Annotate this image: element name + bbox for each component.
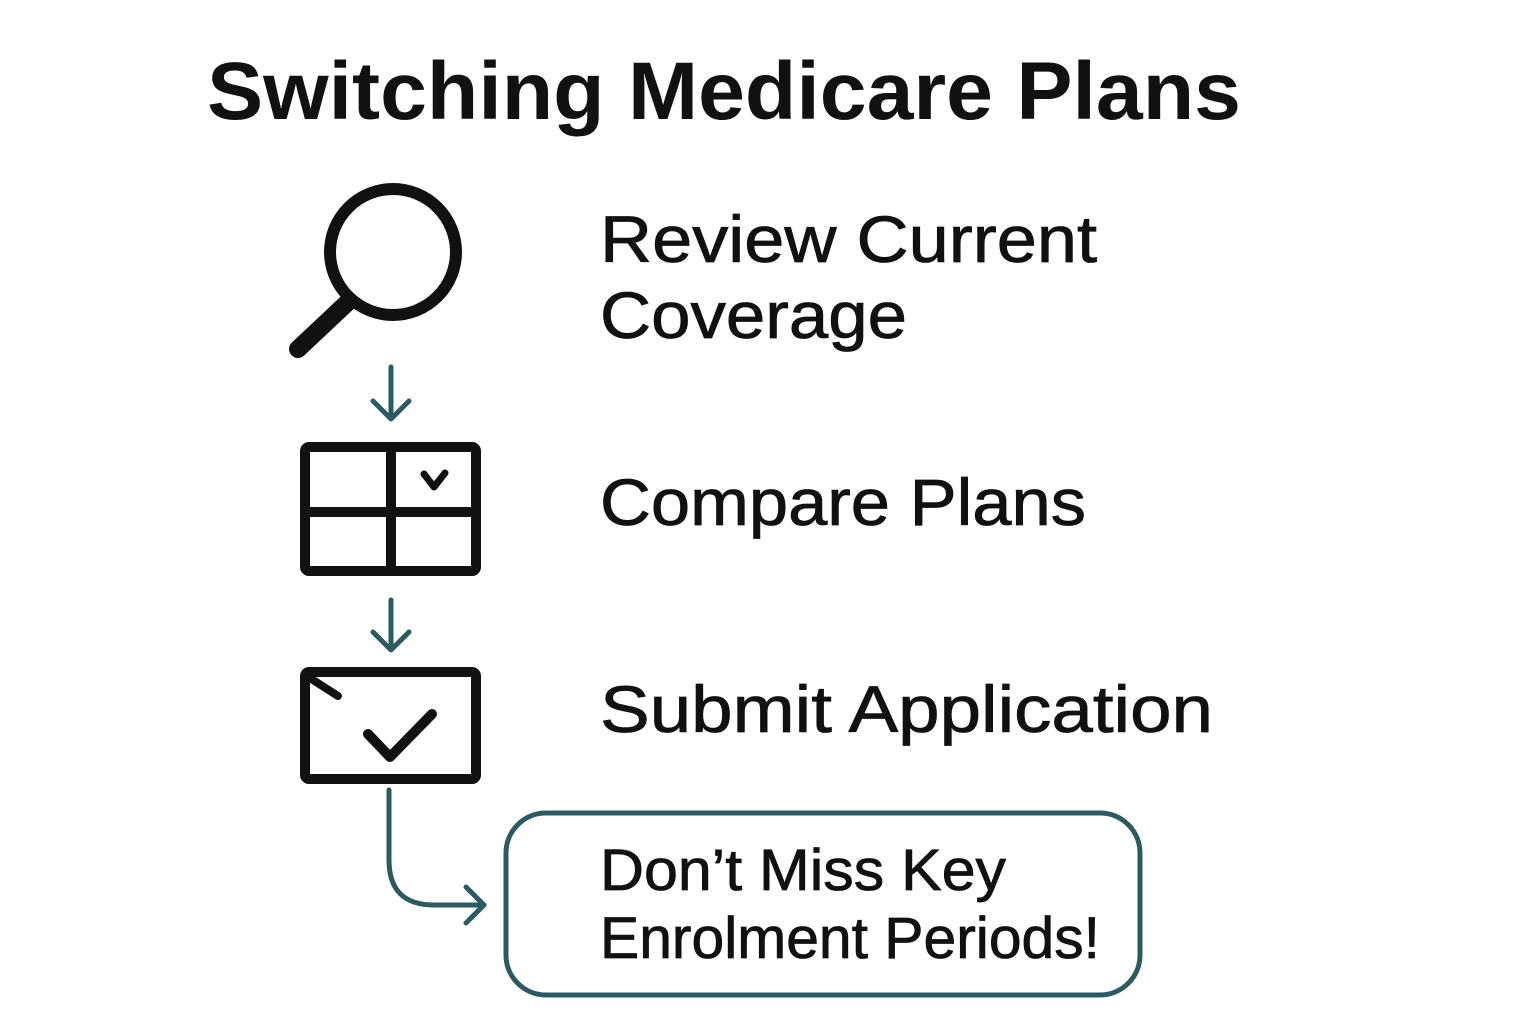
step 1 text bbox=[600, 202, 1097, 352]
icon: magnifier bbox=[298, 189, 456, 349]
icon: application check bbox=[305, 672, 476, 779]
step 3 text: Submit Application bbox=[600, 672, 1213, 746]
callout: enrolment periods: Enrolment Periods! bbox=[600, 906, 1100, 971]
arrow 2 bbox=[373, 600, 409, 650]
icon: comparison grid bbox=[305, 447, 476, 571]
arrow 1 bbox=[373, 367, 409, 419]
step 1 text: Coverage bbox=[600, 278, 907, 352]
step 1 text: Review Current bbox=[600, 202, 1097, 276]
callout: enrolment periods: Don’t Miss Key bbox=[600, 838, 1006, 903]
step 2 text: Compare Plans bbox=[600, 465, 1086, 539]
connector arrow bbox=[389, 790, 484, 923]
title: Switching Medicare Plans bbox=[207, 46, 1241, 137]
callout: enrolment periods bbox=[506, 813, 1140, 995]
